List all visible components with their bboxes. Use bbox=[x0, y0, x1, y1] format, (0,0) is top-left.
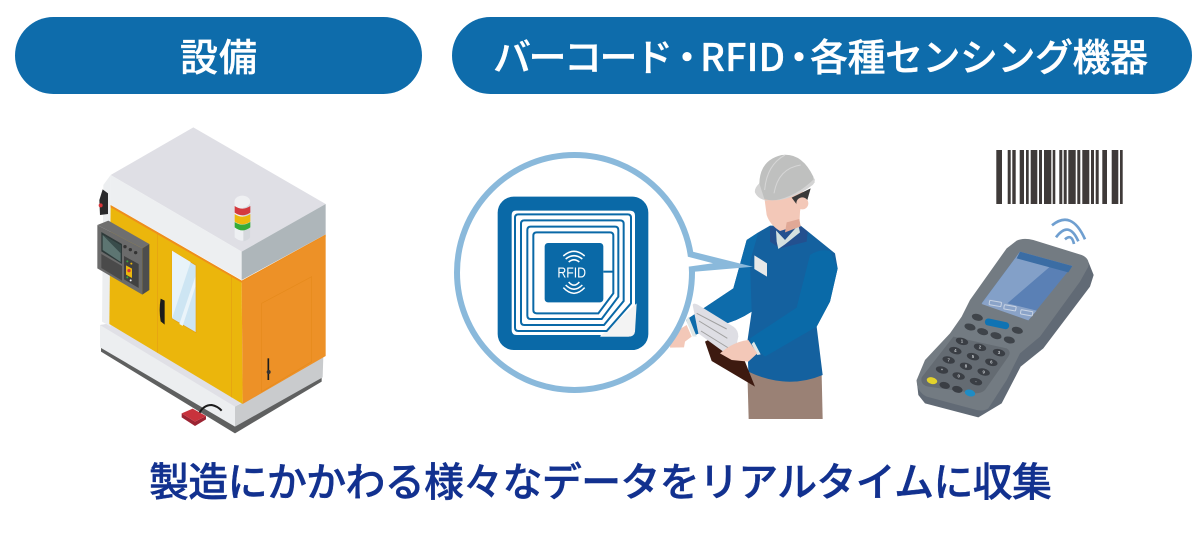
key digits: 1 bbox=[961, 339, 964, 344]
magnifier callout circle bbox=[457, 155, 753, 390]
wireless signal icon bbox=[1052, 220, 1085, 244]
clipboard bbox=[693, 304, 755, 387]
caption: 製造にかかわる様々なデータをリアルタイムに収集 bbox=[149, 461, 1052, 505]
key digits: 6 bbox=[990, 360, 993, 365]
machine base bbox=[100, 323, 323, 433]
tag body bbox=[498, 197, 648, 350]
hard hat bbox=[755, 155, 815, 201]
front hand bbox=[720, 340, 757, 362]
door window bbox=[172, 251, 196, 333]
key digits: 9 bbox=[982, 369, 985, 374]
key digits: 7 bbox=[947, 357, 950, 362]
key digits: 5 bbox=[972, 354, 975, 359]
function keys bbox=[964, 313, 1024, 345]
shirt collar bbox=[776, 225, 800, 249]
heading pill: barcode, RFID and sensing devices: バーコード bbox=[493, 38, 673, 80]
machine side strip bbox=[102, 175, 111, 327]
corner peel bbox=[600, 303, 637, 337]
RFID chip bbox=[545, 243, 603, 302]
heading pill: barcode, RFID and sensing devices: ・ bbox=[668, 38, 706, 80]
heading pill: barcode, RFID and sensing devices: ・ bbox=[780, 38, 818, 80]
worker sweater bbox=[686, 226, 838, 382]
name badge bbox=[754, 255, 767, 277]
scanner front shell bbox=[917, 239, 1089, 411]
blue centre key bbox=[984, 318, 1010, 330]
yellow front panel bbox=[109, 205, 326, 404]
head bbox=[764, 188, 811, 232]
key digits: 8 bbox=[965, 364, 968, 369]
heading pill: equipment: 設備 bbox=[180, 38, 257, 80]
illustration: production machine bbox=[97, 127, 326, 433]
barcode bbox=[996, 150, 1123, 204]
key digits: * bbox=[941, 367, 943, 372]
key digits: 3 bbox=[998, 350, 1001, 355]
illustration: RFID tag bbox=[498, 197, 648, 350]
key digits bbox=[941, 339, 1001, 384]
tag inlay bbox=[512, 211, 635, 337]
heading pill: barcode, RFID and sensing devices: 各種センシング機器 bbox=[810, 38, 1148, 80]
illustration: factory worker with clipboard bbox=[670, 155, 838, 419]
door handle bbox=[160, 299, 165, 325]
back hand bbox=[670, 325, 692, 348]
orange side panel bbox=[242, 235, 326, 404]
machine top cover bbox=[111, 127, 326, 280]
heading pill: equipment bbox=[15, 17, 422, 94]
key digits: - bbox=[975, 379, 977, 384]
sleeve cuffs bbox=[686, 317, 761, 355]
lower radio waves bbox=[563, 282, 585, 293]
rear button box bbox=[99, 189, 108, 215]
signal tower light bbox=[234, 196, 250, 241]
number keypad bbox=[921, 336, 1010, 398]
screen bbox=[982, 252, 1072, 320]
illustration: handheld scanner bbox=[917, 220, 1094, 417]
control panel bbox=[97, 221, 149, 295]
key digits: 2 bbox=[979, 345, 982, 350]
worker trousers bbox=[747, 372, 823, 419]
heading pill: barcode, RFID and sensing devices: RFID bbox=[700, 27, 785, 82]
scanner side shell bbox=[917, 262, 1094, 417]
key digits: 0 bbox=[957, 373, 960, 378]
upper radio waves bbox=[563, 251, 585, 262]
antenna coils bbox=[515, 214, 631, 331]
heading pill: barcode, RFID and sensing devices bbox=[452, 17, 1192, 94]
chip label: RFID bbox=[557, 265, 586, 282]
key digits: 4 bbox=[954, 348, 957, 353]
foot switch bbox=[182, 405, 222, 426]
